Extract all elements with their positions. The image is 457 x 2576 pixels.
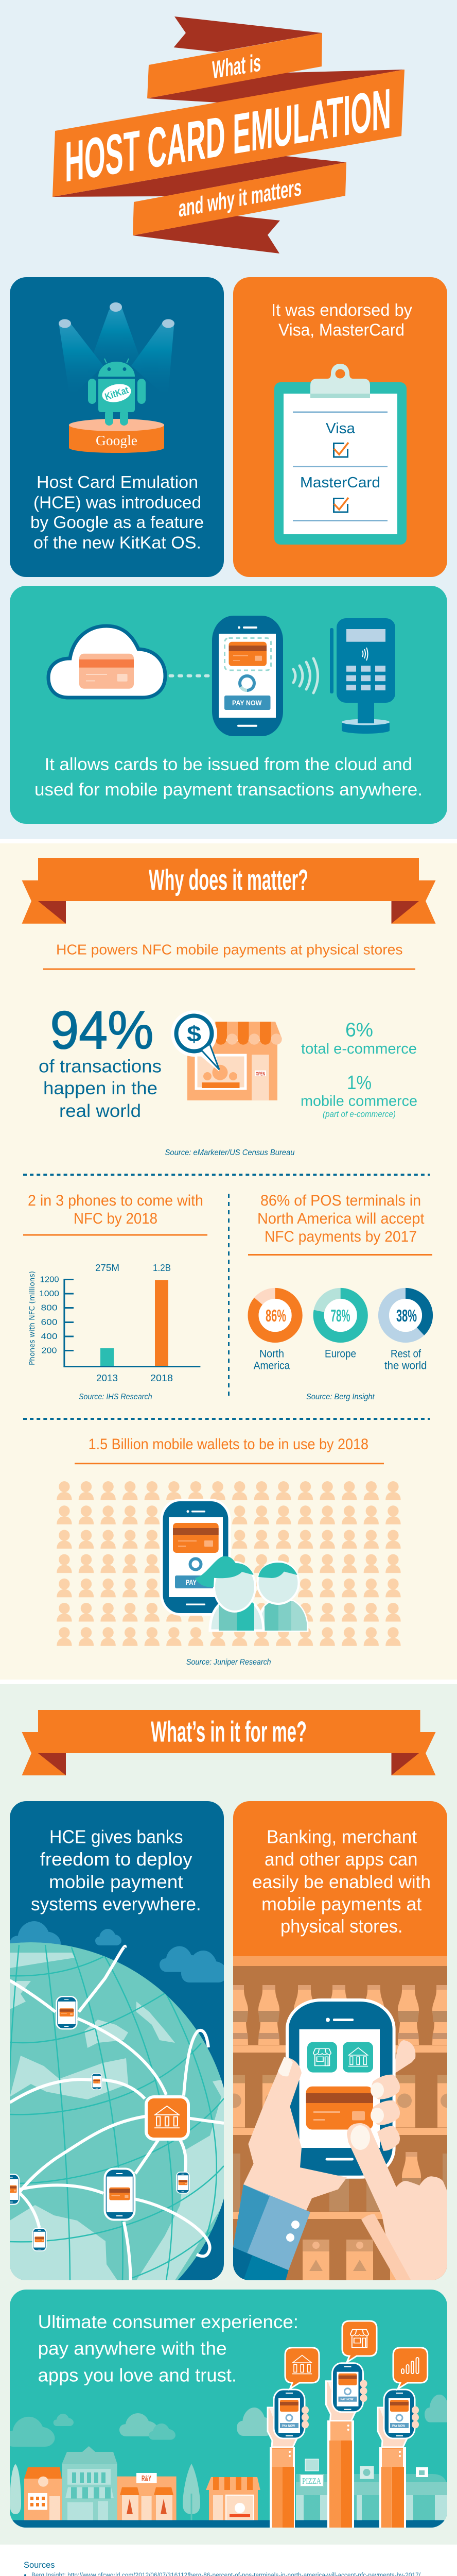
text: gives banks freedom <box>31 1826 201 1914</box>
icon: Google pedestal: Google <box>96 433 137 448</box>
stat: e-commerce: 1% <box>347 1072 372 1094</box>
donut: Rest of the world 38% <box>383 1293 428 1337</box>
text: apps enabled <box>252 1826 431 1937</box>
illustration: store shelves with phone in hands <box>224 1956 457 2280</box>
stat: 94% of transactions: 94% <box>50 1001 153 1060</box>
heading: 86% of POS terminals: NFC payments by 2017 <box>265 1228 417 1245</box>
text: ultimate consumer: apps you love and trust. <box>38 2365 237 2386</box>
icon: man <box>257 1562 307 1631</box>
panel: HCE gives banks freedom <box>10 1801 224 2280</box>
arm 3: PAY NOW <box>392 2425 406 2428</box>
icon: storefront with dollar bubble <box>171 1010 282 1100</box>
text: cards issued: used for mobile payment transactions anywhere. <box>34 780 423 800</box>
footer: sources: Sources <box>24 2560 55 2570</box>
heading banner: What's in it for me?: What’s in it for me? <box>151 1716 307 1749</box>
icon: globe <box>10 1942 224 2280</box>
ribbon faces <box>52 33 405 235</box>
icon: Google pedestal <box>69 419 164 453</box>
panel: why does it matter background <box>0 843 457 1680</box>
source: eMarketer: Source: eMarketer/US Census Bureau <box>165 1148 295 1157</box>
donut: Rest of the world 38%: 38% <box>396 1306 417 1325</box>
building: teal shop <box>62 2446 117 2520</box>
icon: holding hand <box>243 2057 400 2211</box>
icon: payment terminal <box>330 618 395 734</box>
ribbon folds <box>52 16 405 253</box>
text: gives banks freedom: freedom to deploy <box>40 1849 192 1870</box>
building: R&Y store <box>117 2473 177 2520</box>
illustration: street scene <box>5 2363 455 2528</box>
icon: storefront with dollar bubble: $ <box>187 1022 201 1047</box>
text: ultimate consumer <box>38 2311 298 2386</box>
donut: Europe 78% <box>319 1293 362 1337</box>
text: gives banks freedom: HCE gives banks <box>49 1826 183 1848</box>
bar chart: phones with NFC: 2018 <box>150 1373 173 1383</box>
heading: 2 in 3 phones: NFC by 2018 <box>74 1210 157 1227</box>
icons: phones on network <box>3 1996 189 2251</box>
stat: 94% of transactions: real world <box>59 1101 141 1121</box>
network routes <box>10 1946 224 2280</box>
icon: wallet phone: PAY <box>186 1578 197 1586</box>
title: What is: What is <box>212 49 261 84</box>
label: MasterCard: MasterCard <box>300 474 380 491</box>
text: endorsed: It was endorsed by <box>271 300 412 319</box>
stat: e-commerce: total e-commerce <box>301 1041 417 1057</box>
donut: Europe 78%: 78% <box>330 1306 350 1325</box>
heading: 2 in 3 phones: 2 in 3 phones to come with <box>28 1192 203 1209</box>
donut labels: Rest of <box>391 1348 421 1360</box>
icon: trees <box>10 2464 200 2520</box>
icon: android KitKat robot <box>88 359 146 426</box>
icon: phone with PAY NOW <box>212 616 283 736</box>
icon: phone with app icons <box>287 2000 394 2177</box>
icon: clipboard <box>274 364 407 545</box>
source: Juniper: Source: Juniper Research <box>186 1658 271 1667</box>
text: HCE introduced: of the new KitKat OS. <box>33 533 201 552</box>
text: HCE introduced <box>30 472 204 552</box>
icon: MasterCard checkbox <box>333 498 348 512</box>
heading banner: Why does it matter? <box>22 858 435 924</box>
arm 1: PAY NOW <box>282 2425 295 2428</box>
building: orange house <box>24 2467 62 2520</box>
stat: 94% of transactions <box>39 1001 162 1121</box>
heading banner: Why does it matter?: Why does it matter? <box>149 863 308 896</box>
stat: 94% of transactions: happen in the <box>43 1078 157 1098</box>
bar chart: phones with NFC: 400 <box>41 1332 58 1341</box>
bar chart: phones with NFC: 800 <box>41 1304 58 1313</box>
donut labels: Europe <box>325 1348 356 1360</box>
text: apps enabled: mobile payments at <box>261 1893 421 1914</box>
donut: North America 86% <box>253 1293 297 1337</box>
source: Berg: Source: Berg Insight <box>306 1393 375 1401</box>
stat: e-commerce <box>301 1020 417 1119</box>
bar chart: phones with NFC: 2013 <box>96 1373 118 1383</box>
arm 2 <box>326 2363 367 2528</box>
bar chart: phones with NFC: 200 <box>41 1347 57 1355</box>
source: IHS: Source: IHS Research <box>79 1393 152 1401</box>
arcade right <box>296 2459 447 2520</box>
bar chart: phones with NFC: Phones with NFC (millions) <box>28 1271 37 1365</box>
stat: e-commerce: (part of e-commerce) <box>323 1109 396 1119</box>
illustration: globe network <box>10 1921 224 2280</box>
bar chart: phones with NFC: 1200 <box>40 1275 59 1284</box>
icon: storefront with dollar bubble: OPEN <box>256 1072 265 1077</box>
bar chart: phones with NFC: 1000 <box>39 1290 59 1298</box>
subheading: HCE powers NFC: HCE powers NFC mobile payments at physical stores <box>56 942 403 958</box>
icon: bank speech bubble <box>285 2348 319 2389</box>
text: HCE introduced: Host Card Emulation <box>37 472 198 492</box>
icons: raised arms <box>268 2363 419 2528</box>
donut labels: North <box>259 1348 284 1360</box>
street <box>10 2520 447 2528</box>
arcade right: PIZZA <box>302 2476 322 2486</box>
arm 3 <box>378 2389 419 2528</box>
icon: signal bars speech bubble <box>393 2348 428 2389</box>
donut: North America 86%: 86% <box>266 1306 286 1325</box>
icon: shop speech bubble <box>342 2321 377 2362</box>
heading banner: What's in it for me? <box>22 1710 435 1775</box>
text: ultimate consumer: Ultimate consumer experience: <box>38 2311 298 2332</box>
bar chart: phones with NFC: 600 <box>41 1318 58 1327</box>
bar chart: phones with NFC: 275M <box>95 1263 119 1273</box>
icon: android KitKat robot: KitKat <box>103 385 130 403</box>
bar chart: phones with NFC: 1.2B <box>153 1263 171 1273</box>
footer: sources <box>24 2560 420 2576</box>
icon: clouds <box>5 2395 455 2447</box>
building: R&Y store: R&Y <box>142 2475 151 2483</box>
icon: Visa checkbox <box>333 443 348 457</box>
heading: 86% of POS terminals: North America will accept <box>257 1210 425 1227</box>
stat: e-commerce: mobile commerce <box>301 1093 417 1110</box>
heading: 86% of POS terminals <box>257 1192 425 1245</box>
heading: 1.5 Billion mobile wallets: 1.5 Billion mobile wallets to be in use by 2018 <box>89 1436 368 1453</box>
panel: cards issued from the cloud <box>10 586 447 824</box>
stat: e-commerce: 6% <box>345 1020 373 1041</box>
text: endorsed <box>271 300 412 340</box>
panel: ultimate consumer experience <box>5 2290 455 2528</box>
icon: shirt cuff <box>233 2184 310 2280</box>
stat: 94% of transactions: of transactions <box>39 1057 162 1077</box>
text: apps enabled: Banking, merchant <box>267 1826 417 1848</box>
heading: 2 in 3 phones <box>28 1192 203 1227</box>
text: HCE introduced: by Google as a feature <box>30 513 204 532</box>
text: apps enabled: physical stores. <box>280 1916 403 1937</box>
icon: clouds <box>10 1921 227 1982</box>
text: cards issued <box>34 755 423 800</box>
panel: HCE introduced by Google <box>10 277 224 577</box>
icon: NFC waves <box>293 658 318 693</box>
building: striped awning store <box>206 2477 260 2520</box>
pictogram: people grid <box>54 1481 405 1647</box>
text: cards issued: It allows cards to be issued from the cloud and <box>45 755 412 774</box>
illustration: phone and couple <box>162 1500 307 1631</box>
store shelves <box>224 1956 457 2280</box>
text: apps enabled: easily be enabled with <box>252 1871 431 1892</box>
donut labels: the world <box>384 1360 427 1372</box>
text: endorsed: Visa, MasterCard <box>278 320 405 340</box>
panel: what's in it for me background <box>0 1684 457 2545</box>
arm 2: PAY NOW <box>341 2398 354 2401</box>
icon: phone with PAY NOW: PAY NOW <box>232 699 262 707</box>
donut labels: America <box>254 1360 290 1372</box>
text: gives banks freedom: mobile payment <box>49 1871 183 1892</box>
back finger <box>394 2040 415 2074</box>
panel: intro background <box>0 0 457 839</box>
icon: woman <box>195 1556 263 1631</box>
text: ultimate consumer: pay anywhere with the <box>38 2338 227 2359</box>
text: gives banks freedom: systems everywhere. <box>31 1893 201 1914</box>
text: HCE introduced: (HCE) was introduced <box>33 493 201 512</box>
heading: 86% of POS terminals: 86% of POS terminals in <box>260 1192 421 1209</box>
panel: endorsed by Visa, MasterCard <box>233 277 447 577</box>
text: apps enabled: and other apps can <box>265 1849 417 1870</box>
icon: bank node <box>146 2097 188 2139</box>
label: Visa: Visa <box>326 420 356 437</box>
title ribbon <box>52 16 405 253</box>
arm 1 <box>268 2389 309 2528</box>
dotted connector <box>169 674 210 677</box>
icon: spotlights <box>59 302 174 398</box>
donut labels <box>254 1348 427 1372</box>
bar chart: phones with NFC <box>28 1263 200 1383</box>
panel: banking, merchant and other apps <box>224 1801 457 2280</box>
title: and why it matters: and why it matters <box>179 174 302 222</box>
icon: cloud with card <box>48 626 165 698</box>
icon: wallet phone <box>162 1500 230 1615</box>
icon: pointing hand <box>347 2123 447 2280</box>
